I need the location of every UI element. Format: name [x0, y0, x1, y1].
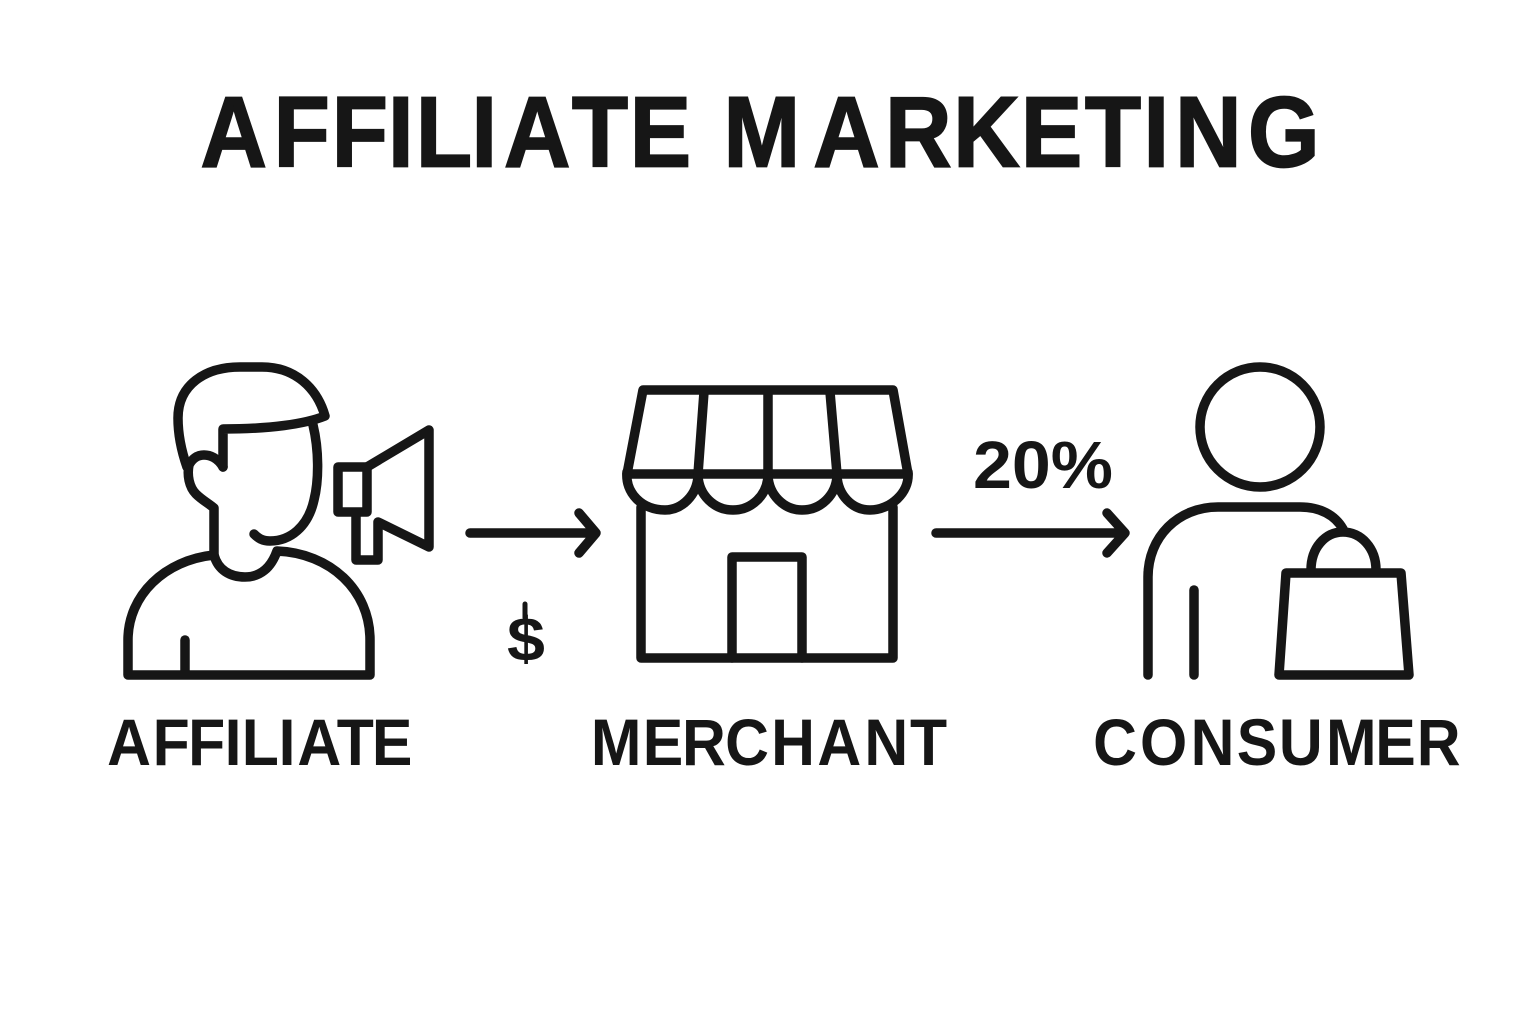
arm line — [180, 640, 190, 673]
awning scallops — [627, 472, 908, 510]
label: merchant: MERCHANT — [591, 707, 947, 780]
hair — [178, 367, 325, 467]
head — [1200, 367, 1320, 487]
label: affiliate: AFFILIATE — [107, 707, 412, 780]
label: dollar sign: $ — [507, 605, 545, 674]
face — [254, 425, 318, 541]
arrow: affiliate to merchant — [470, 513, 596, 553]
icon: merchant storefront — [627, 390, 908, 658]
icon: affiliate person with megaphone — [128, 367, 429, 675]
label: 20 percent: 20% — [973, 428, 1113, 503]
bag — [1279, 573, 1409, 675]
door — [732, 557, 802, 658]
awning ribs — [698, 392, 837, 474]
label: consumer: CONSUMER — [1093, 707, 1461, 780]
awning — [627, 390, 908, 474]
arrow: merchant to consumer — [936, 513, 1125, 553]
ear and neck — [188, 455, 223, 555]
title: AFFILIATE MARKETING — [200, 77, 1320, 188]
shoulders — [128, 551, 370, 675]
body — [1148, 507, 1343, 675]
megaphone handle box — [338, 467, 367, 512]
walls — [641, 507, 893, 658]
megaphone cone — [356, 430, 429, 560]
bag handle — [1311, 532, 1376, 570]
arm line — [1189, 590, 1199, 675]
icon: consumer with shopping bag — [1148, 367, 1409, 675]
